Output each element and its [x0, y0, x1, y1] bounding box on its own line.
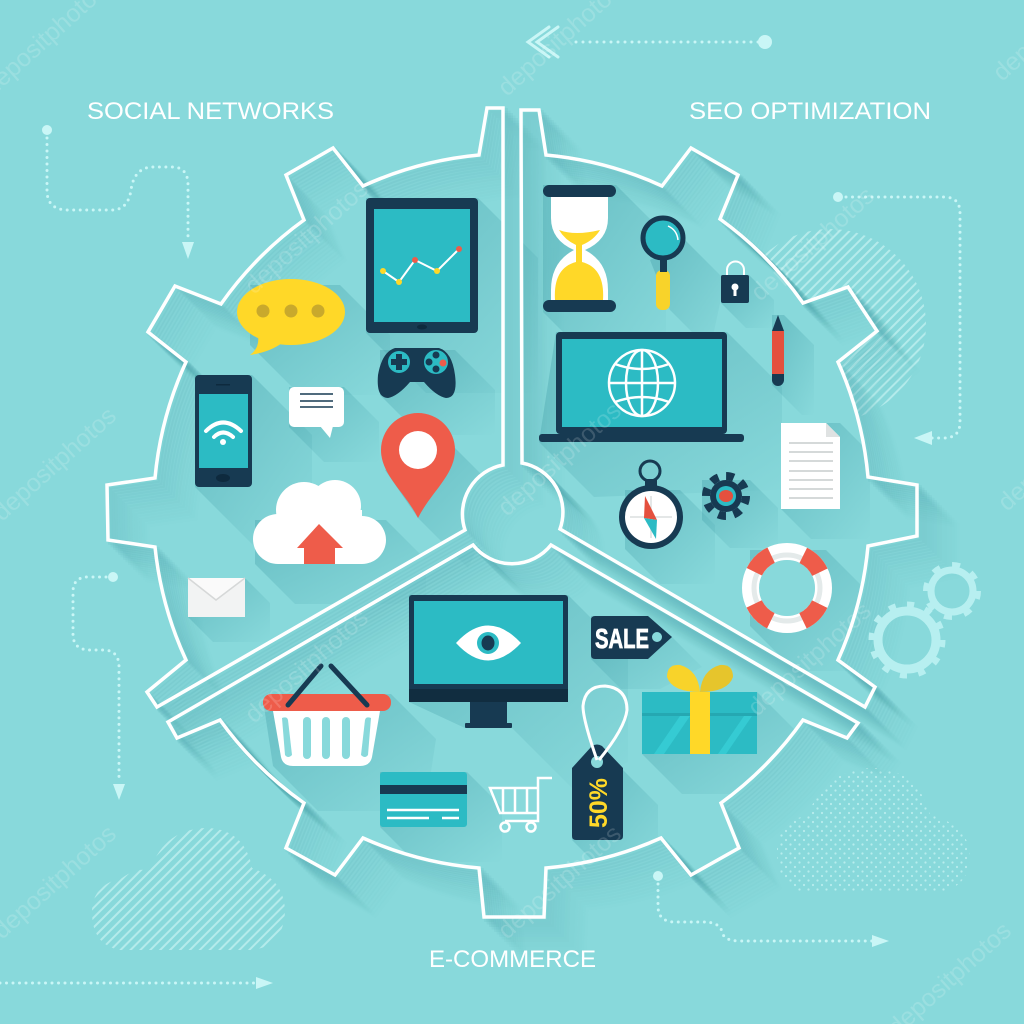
- heading: e-commerce: E-COMMERCE: [429, 946, 596, 973]
- icon: laptop with globe: [539, 332, 744, 442]
- icon: compass: [619, 461, 683, 549]
- icon: cloud upload: [253, 480, 386, 564]
- icon: yellow speech bubble: [237, 279, 345, 355]
- icon: 50 percent price tag: [572, 686, 627, 840]
- icon: hourglass: [543, 185, 616, 312]
- hatched circle behind SEO segment: [734, 229, 926, 421]
- icon: gift box: [642, 665, 757, 754]
- icon: envelope: [188, 578, 245, 617]
- dotted arrow: bottom left: [0, 977, 273, 989]
- icon: pencil: [772, 315, 784, 386]
- gear long shadow: [110, 110, 957, 957]
- icon: location pin: [381, 413, 455, 518]
- icon: magnifying glass: [643, 218, 683, 310]
- icon: white message bubble: [289, 387, 344, 438]
- gear body fill: [107, 108, 917, 917]
- icon: smartphone with wifi: [195, 375, 252, 487]
- icon: padlock: [721, 262, 749, 303]
- icon: sale tag: SALE: [595, 623, 649, 654]
- gear outline: SEO optimization segment: [521, 110, 917, 707]
- decorative gears at right: [872, 565, 978, 675]
- icon: shopping basket: [263, 666, 391, 766]
- gear outline: social networks segment: [107, 108, 503, 707]
- watermark: depositphotos: [492, 820, 627, 945]
- icon: desktop monitor with eye: [409, 595, 568, 728]
- dotted cloud bottom right: [777, 768, 970, 892]
- icon: sale tag: [591, 616, 672, 659]
- icon long shadows: [188, 185, 871, 875]
- dotted arrow: bottom right: [653, 871, 889, 947]
- icon: settings gear: [706, 476, 746, 516]
- gear outline: e-commerce segment: [168, 545, 858, 917]
- watermark: depositphotos: [239, 175, 374, 300]
- watermark: depositphotos: [742, 597, 877, 722]
- icon: lifebuoy: [750, 552, 824, 624]
- hatched cloud bottom left: [92, 828, 285, 950]
- icon: credit card: [380, 772, 467, 827]
- icon: 50 percent price tag: 50%: [585, 778, 613, 828]
- icon: shopping cart: [490, 778, 552, 832]
- dotted arrow: right: [833, 192, 960, 445]
- heading: SEO optimization: SEO OPTIMIZATION: [689, 98, 931, 125]
- dotted arrow: top left: [42, 125, 194, 259]
- dotted arrow: top: [528, 27, 772, 57]
- icon: document: [781, 423, 840, 509]
- watermark: depositphotos: [239, 604, 374, 729]
- icon: tablet with line chart: [366, 198, 478, 333]
- watermark: depositphotos: [492, 397, 627, 522]
- icon: game controller: [378, 348, 456, 398]
- watermark: depositphotos: [745, 182, 880, 307]
- heading: social networks: SOCIAL NETWORKS: [87, 98, 334, 125]
- dotted arrow: lower left: [73, 572, 125, 800]
